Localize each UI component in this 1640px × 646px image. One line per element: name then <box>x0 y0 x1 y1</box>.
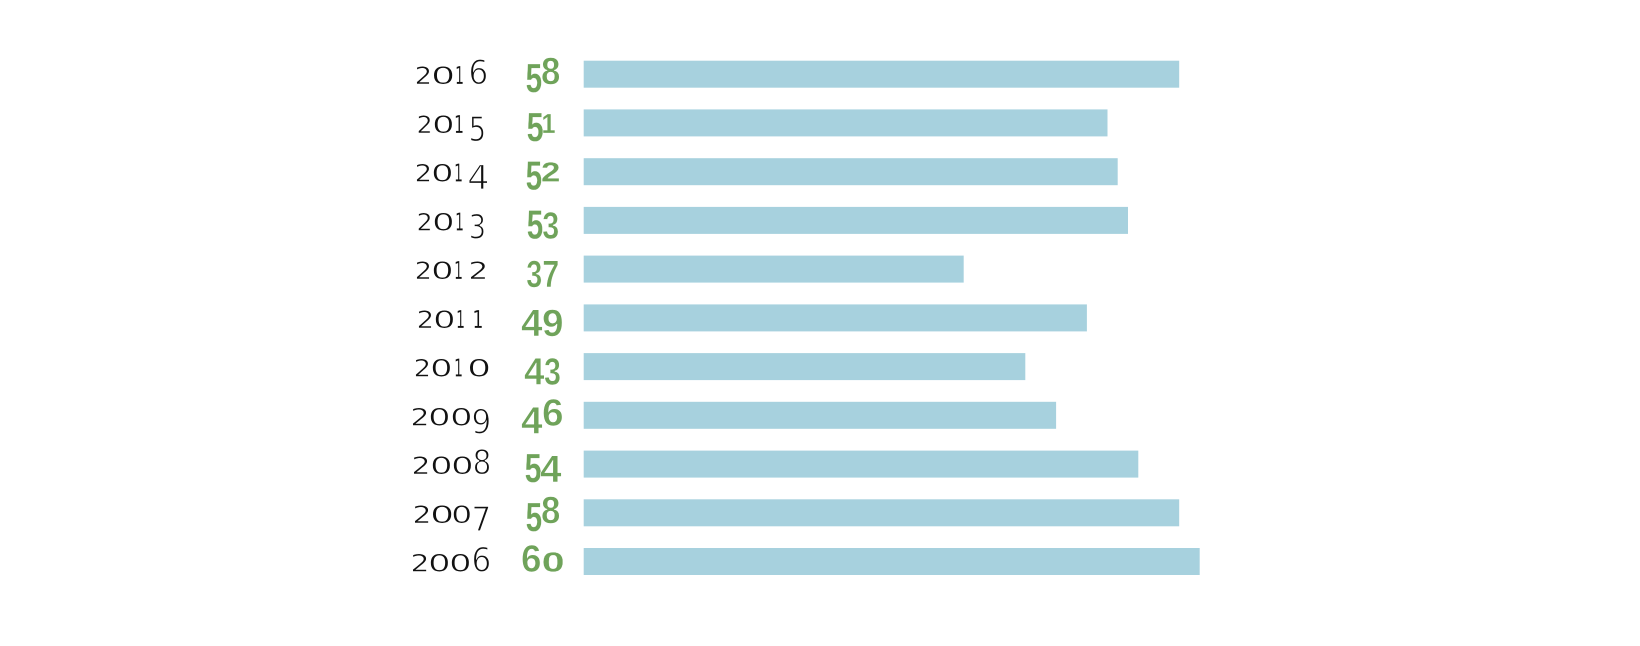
value 49: 9 <box>542 303 564 345</box>
year label 2012: 2 <box>468 257 488 285</box>
value 43: 3 <box>544 352 561 394</box>
year label 2006: 2 <box>410 550 430 578</box>
year label 2007: 2 <box>412 501 432 529</box>
value 53: 3 <box>542 205 559 247</box>
value 53: 5 <box>527 201 543 247</box>
value 52: 5 <box>526 153 542 199</box>
bar 2009 <box>584 402 1056 429</box>
row: 2012 <box>415 254 964 296</box>
bar 2015 <box>584 109 1108 136</box>
value 60: 6 <box>521 538 542 580</box>
year label 2016: 1 <box>455 61 464 90</box>
year label 2016: 0 <box>431 62 455 90</box>
year label 2011: 1 <box>472 305 484 334</box>
value 60: 0 <box>542 546 565 578</box>
year label 2015: 0 <box>432 111 455 139</box>
value 54: 5 <box>525 445 542 491</box>
year label 2006: 0 <box>428 550 451 578</box>
year label 2013: 3 <box>469 207 486 247</box>
bar 2011 <box>584 304 1087 331</box>
value 52: 2 <box>541 157 560 188</box>
bar 2012 <box>584 256 964 283</box>
year label 2007: 7 <box>471 500 491 540</box>
row: 2016 <box>415 51 1179 101</box>
year label 2013: 2 <box>417 208 433 236</box>
year label 2012: 0 <box>431 257 454 285</box>
year label 2016: 6 <box>468 53 488 93</box>
value 51: 1 <box>542 108 556 139</box>
row: 2013 <box>417 201 1128 247</box>
row: 2015 <box>417 104 1108 150</box>
year label 2010: 1 <box>454 354 463 383</box>
row: 2007 <box>412 490 1179 540</box>
year label 2010: 0 <box>467 355 491 383</box>
year label 2008: 0 <box>430 452 453 480</box>
year label 2016: 2 <box>415 62 432 90</box>
year label 2007: 0 <box>430 501 454 529</box>
row: 2008 <box>412 443 1138 491</box>
year label 2012: 1 <box>454 256 463 285</box>
bar 2006 <box>584 548 1200 575</box>
year label 2010: 0 <box>430 355 453 383</box>
value 37: 7 <box>542 254 559 296</box>
value 43: 4 <box>524 352 544 394</box>
year label 2008: 2 <box>412 452 430 480</box>
year label 2009: 9 <box>471 402 491 442</box>
year label 2015: 2 <box>417 111 433 139</box>
year label 2010: 2 <box>414 355 431 383</box>
year label 2008: 0 <box>451 452 474 480</box>
value 51: 5 <box>527 104 544 150</box>
year label 2013: 0 <box>432 208 455 236</box>
row: 2009 <box>410 392 1056 442</box>
year label 2012: 2 <box>415 257 432 285</box>
value 58: 8 <box>541 490 560 532</box>
year label 2006: 6 <box>471 540 491 580</box>
row: 2014 <box>415 153 1118 199</box>
year label 2007: 0 <box>451 501 472 529</box>
year label 2008: 8 <box>472 443 492 483</box>
bar 2008 <box>584 451 1138 478</box>
value 58: 8 <box>541 51 560 93</box>
year label 2011: 0 <box>433 306 456 334</box>
bar 2007 <box>584 499 1179 526</box>
year label 2014: 2 <box>415 160 432 188</box>
year label 2009: 0 <box>450 403 473 431</box>
value 54: 4 <box>540 449 562 491</box>
year label 2009: 0 <box>428 403 451 431</box>
year label 2009: 2 <box>410 403 430 431</box>
year label 2014: 1 <box>454 159 463 188</box>
row: 2011 <box>417 303 1087 345</box>
row: 2006 <box>410 538 1200 580</box>
bar 2016 <box>584 61 1179 88</box>
value 58: 5 <box>526 494 542 540</box>
year label 2015: 1 <box>454 110 464 139</box>
value 46: 6 <box>542 392 564 434</box>
value 58: 5 <box>526 55 542 101</box>
year label 2015: 5 <box>469 110 486 150</box>
value 46: 4 <box>521 400 543 442</box>
year label 2006: 0 <box>449 550 472 578</box>
bar 2013 <box>584 207 1128 234</box>
value 49: 4 <box>521 303 543 345</box>
bar 2014 <box>584 158 1118 185</box>
year label 2011: 1 <box>456 305 465 334</box>
value 37: 3 <box>526 254 542 296</box>
year label 2014: 4 <box>467 159 490 199</box>
year label 2011: 2 <box>417 306 434 334</box>
bar 2010 <box>584 353 1025 380</box>
year label 2013: 1 <box>455 207 464 236</box>
row: 2010 <box>414 352 1025 394</box>
year label 2014: 0 <box>431 160 454 188</box>
